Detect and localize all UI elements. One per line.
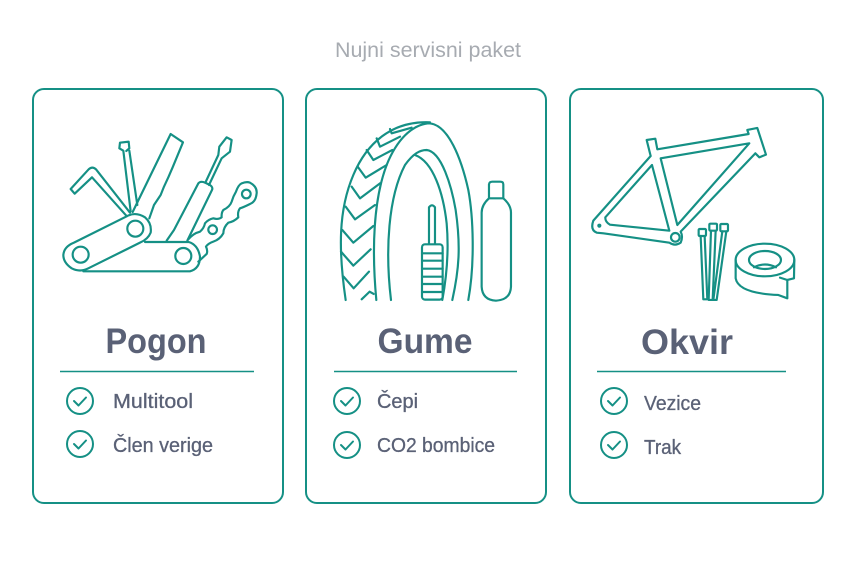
- icon: cable ties: [699, 224, 728, 300]
- list item: Clen verige: [67, 431, 213, 457]
- list item: Trak: Trak: [644, 437, 682, 459]
- icon: tape roll: [736, 244, 794, 298]
- list item: Cepi: Čepi: [377, 390, 418, 413]
- icon: bike frame: [592, 128, 766, 245]
- icon: tyre: [341, 122, 473, 300]
- list item: Vezice: [601, 388, 701, 415]
- heading: Pogon: Pogon: [106, 322, 206, 361]
- heading: Okvir: Okvir: [641, 323, 733, 362]
- panel: Gume: [306, 89, 546, 503]
- list item: Multitool: [67, 388, 193, 414]
- list item: Vezice: Vezice: [644, 393, 701, 415]
- icon: plug tool: [422, 205, 443, 300]
- list item: CO2 bombice: [334, 432, 495, 458]
- list item: Multitool: Multitool: [113, 391, 193, 413]
- heading: Gume: Gume: [378, 322, 472, 361]
- list item: Clen verige: Člen verige: [113, 434, 213, 457]
- card frame: Okvir: [570, 89, 823, 503]
- panel: Okvir: [570, 89, 823, 503]
- list item: CO2 bombice: CO2 bombice: [377, 435, 495, 457]
- card frame: Pogon: [33, 89, 283, 503]
- title: Nujni servisni paket: [335, 39, 521, 62]
- list item: Trak: [601, 432, 682, 459]
- card frame: Gume: [306, 89, 546, 503]
- icon: multitool: [63, 134, 257, 271]
- icon: CO2 cartridge: [482, 182, 511, 301]
- panel: Pogon: [33, 89, 283, 503]
- list item: Cepi: [334, 388, 418, 414]
